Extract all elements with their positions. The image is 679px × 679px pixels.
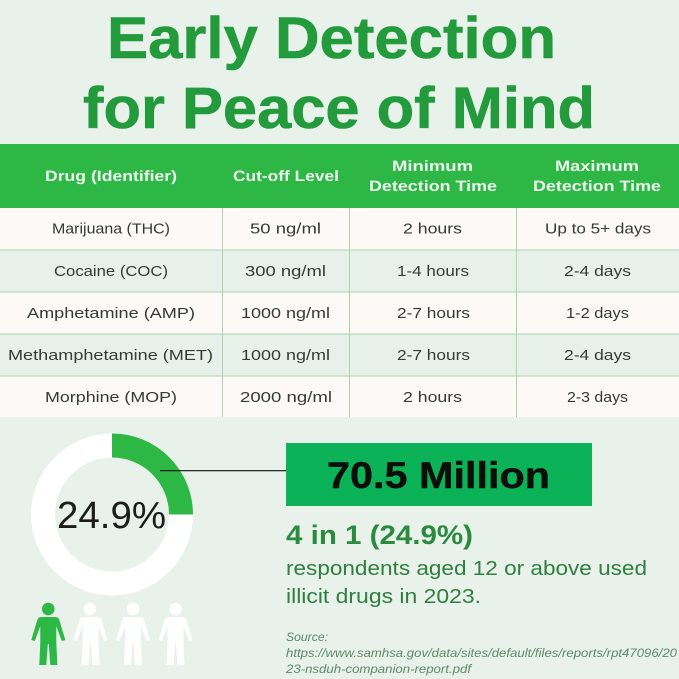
table rows: 2000 ng/ml: [240, 389, 332, 406]
icon row: people, one in four: [31, 603, 192, 665]
source citation: https://www.samhsa.gov/data/sites/default/files/reports/rpt47096/20: [286, 648, 678, 660]
table rows: Morphine (MOP): [45, 389, 177, 406]
table rows: Up to 5+ days: [545, 220, 651, 238]
table rows: 2-3 days: [567, 389, 628, 406]
table: drug detection windows: [0, 144, 679, 417]
table header: Detection Time: [533, 178, 661, 195]
table rows: 2-7 hours: [397, 305, 470, 322]
icon: white person 2: [116, 603, 150, 665]
title: for Peace of Mind: [83, 76, 595, 141]
callout: 70.5 Million: 70.5 Million: [327, 455, 550, 496]
table rows: 2-4 days: [564, 347, 631, 364]
table header: [0, 144, 679, 208]
icon: green person: [31, 603, 65, 665]
table rows: 1-4 hours: [397, 263, 469, 280]
table header: Cut-off Level: [233, 168, 339, 185]
stat description: illicit drugs in 2023.: [286, 586, 481, 608]
table rows: 2 hours: [403, 389, 462, 406]
table header: Minimum: [392, 158, 473, 175]
table rows: 2-7 hours: [397, 347, 470, 364]
table rows: 300 ng/ml: [245, 263, 326, 280]
donut chart: 24.9%: 24.9%: [57, 495, 166, 537]
table rows: 1-2 days: [566, 305, 629, 322]
stat description: [286, 558, 647, 608]
table rows: 1000 ng/ml: [241, 305, 330, 322]
title: Early Detection: [107, 6, 556, 71]
table rows: 1000 ng/ml: [241, 347, 330, 364]
stat heading: 4 in 1 (24.9%): [286, 520, 473, 550]
callout: 70.5 Million: [286, 443, 592, 506]
source citation: [285, 632, 678, 676]
table header: Drug (Identifier): [45, 168, 177, 185]
source citation: 23-nsduh-companion-report.pdf: [285, 664, 473, 676]
table rows: Cocaine (COC): [54, 263, 168, 280]
table rows: Marijuana (THC): [52, 220, 170, 238]
table header: Maximum: [555, 158, 639, 175]
table header: Detection Time: [369, 178, 497, 195]
icon: white person 1: [74, 603, 108, 665]
table rows: Methamphetamine (MET): [8, 347, 213, 364]
table rows: 2-4 days: [564, 263, 631, 280]
title: [83, 6, 595, 141]
table rows: 2 hours: [403, 220, 462, 238]
connector line: [160, 470, 286, 472]
table rows: [8, 220, 651, 406]
table rows: Amphetamine (AMP): [27, 305, 195, 322]
icon: white person 3: [158, 603, 192, 665]
stat description: respondents aged 12 or above used: [286, 558, 647, 580]
table rows: 50 ng/ml: [250, 220, 321, 238]
source citation: Source:: [286, 632, 328, 644]
donut chart: 24.9%: [43, 434, 193, 584]
